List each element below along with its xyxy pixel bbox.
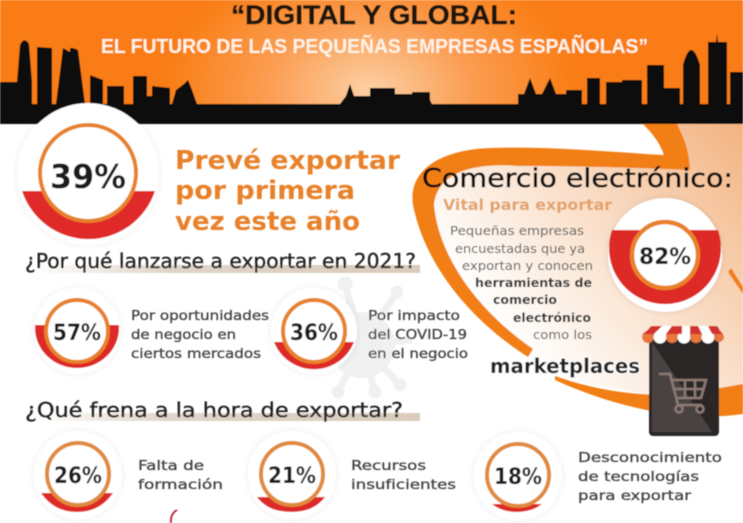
heading: comercio electrónico: Comercio electrónico:	[422, 164, 733, 194]
stat 26%: 26%	[54, 464, 102, 489]
text: covid: Por impacto	[368, 308, 460, 324]
title: “DIGITAL Y GLOBAL:	[231, 0, 517, 30]
text: tecnologías: para exportar	[578, 488, 692, 504]
icon: tablet shop	[642, 326, 724, 436]
text: recursos: insuficientes	[351, 477, 456, 493]
description text: como los	[533, 327, 592, 342]
description text	[450, 223, 593, 342]
description text: exportan y conocen	[462, 258, 593, 273]
stat 36%	[271, 288, 357, 374]
text: oportunidades: ciertos mercados	[131, 346, 261, 362]
description text: electrónico	[513, 310, 591, 325]
heading: por qué lanzarse: ¿Por qué lanzarse a exportar en 2021?	[25, 249, 416, 273]
text: recursos: Recursos	[351, 458, 426, 474]
virus watermark	[318, 277, 412, 398]
awning	[642, 326, 724, 344]
subheading: vital para exportar: Vital para exportar	[443, 196, 612, 214]
description text: encuestadas que ya	[455, 241, 585, 256]
text: tecnologías: de tecnologías	[578, 469, 699, 485]
text: oportunidades: de negocio en	[131, 327, 236, 343]
description text: Pequeñas empresas	[450, 223, 584, 238]
description text: comercio	[493, 292, 557, 307]
stat 21%	[248, 431, 336, 519]
stat 57%: 57%	[53, 321, 101, 346]
header	[0, 0, 743, 124]
red flourish	[171, 510, 177, 523]
text: formación	[138, 458, 223, 493]
headline: prevé exportar	[175, 146, 400, 237]
text: formación: formación	[138, 477, 223, 493]
tablet body	[649, 326, 719, 436]
city skyline	[0, 34, 743, 124]
stat 26%	[34, 431, 122, 519]
stat 82%: 82%	[639, 245, 691, 270]
text: covid: en el negocio	[368, 346, 468, 362]
label: marketplaces: marketplaces	[490, 354, 640, 378]
stat 36%: 36%	[290, 321, 338, 346]
stat 39%: 39%	[50, 157, 126, 196]
header background	[0, 0, 743, 124]
headline: prevé exportar: vez este año	[175, 207, 360, 237]
stat 21%: 21%	[268, 464, 316, 489]
stat 82%	[608, 198, 722, 312]
text: recursos	[351, 458, 456, 493]
stat 39%	[17, 103, 159, 245]
subtitle: EL FUTURO DE LAS PEQUEÑAS EMPRESAS ESPAÑOLAS”	[101, 35, 648, 58]
stat 18%: 18%	[494, 465, 542, 490]
text: covid	[368, 308, 468, 362]
cart	[659, 374, 706, 412]
stat 18%	[474, 432, 562, 520]
text: covid: del COVID-19	[368, 327, 467, 343]
headline: prevé exportar: Prevé exportar	[175, 146, 400, 176]
panel: e-commerce background	[424, 124, 743, 399]
text: formación: Falta de	[138, 458, 204, 474]
headline: prevé exportar: por primera	[175, 176, 355, 206]
text: oportunidades	[131, 308, 269, 362]
description text: herramientas de	[475, 275, 592, 290]
stat 57%	[34, 288, 120, 374]
text: oportunidades: Por oportunidades	[131, 308, 269, 324]
text: tecnologías: Desconocimiento	[578, 450, 722, 466]
heading: qué frena: ¿Qué frena a la hora de exportar?	[25, 398, 403, 422]
orange swoosh	[412, 124, 743, 416]
text: tecnologías	[578, 450, 722, 504]
